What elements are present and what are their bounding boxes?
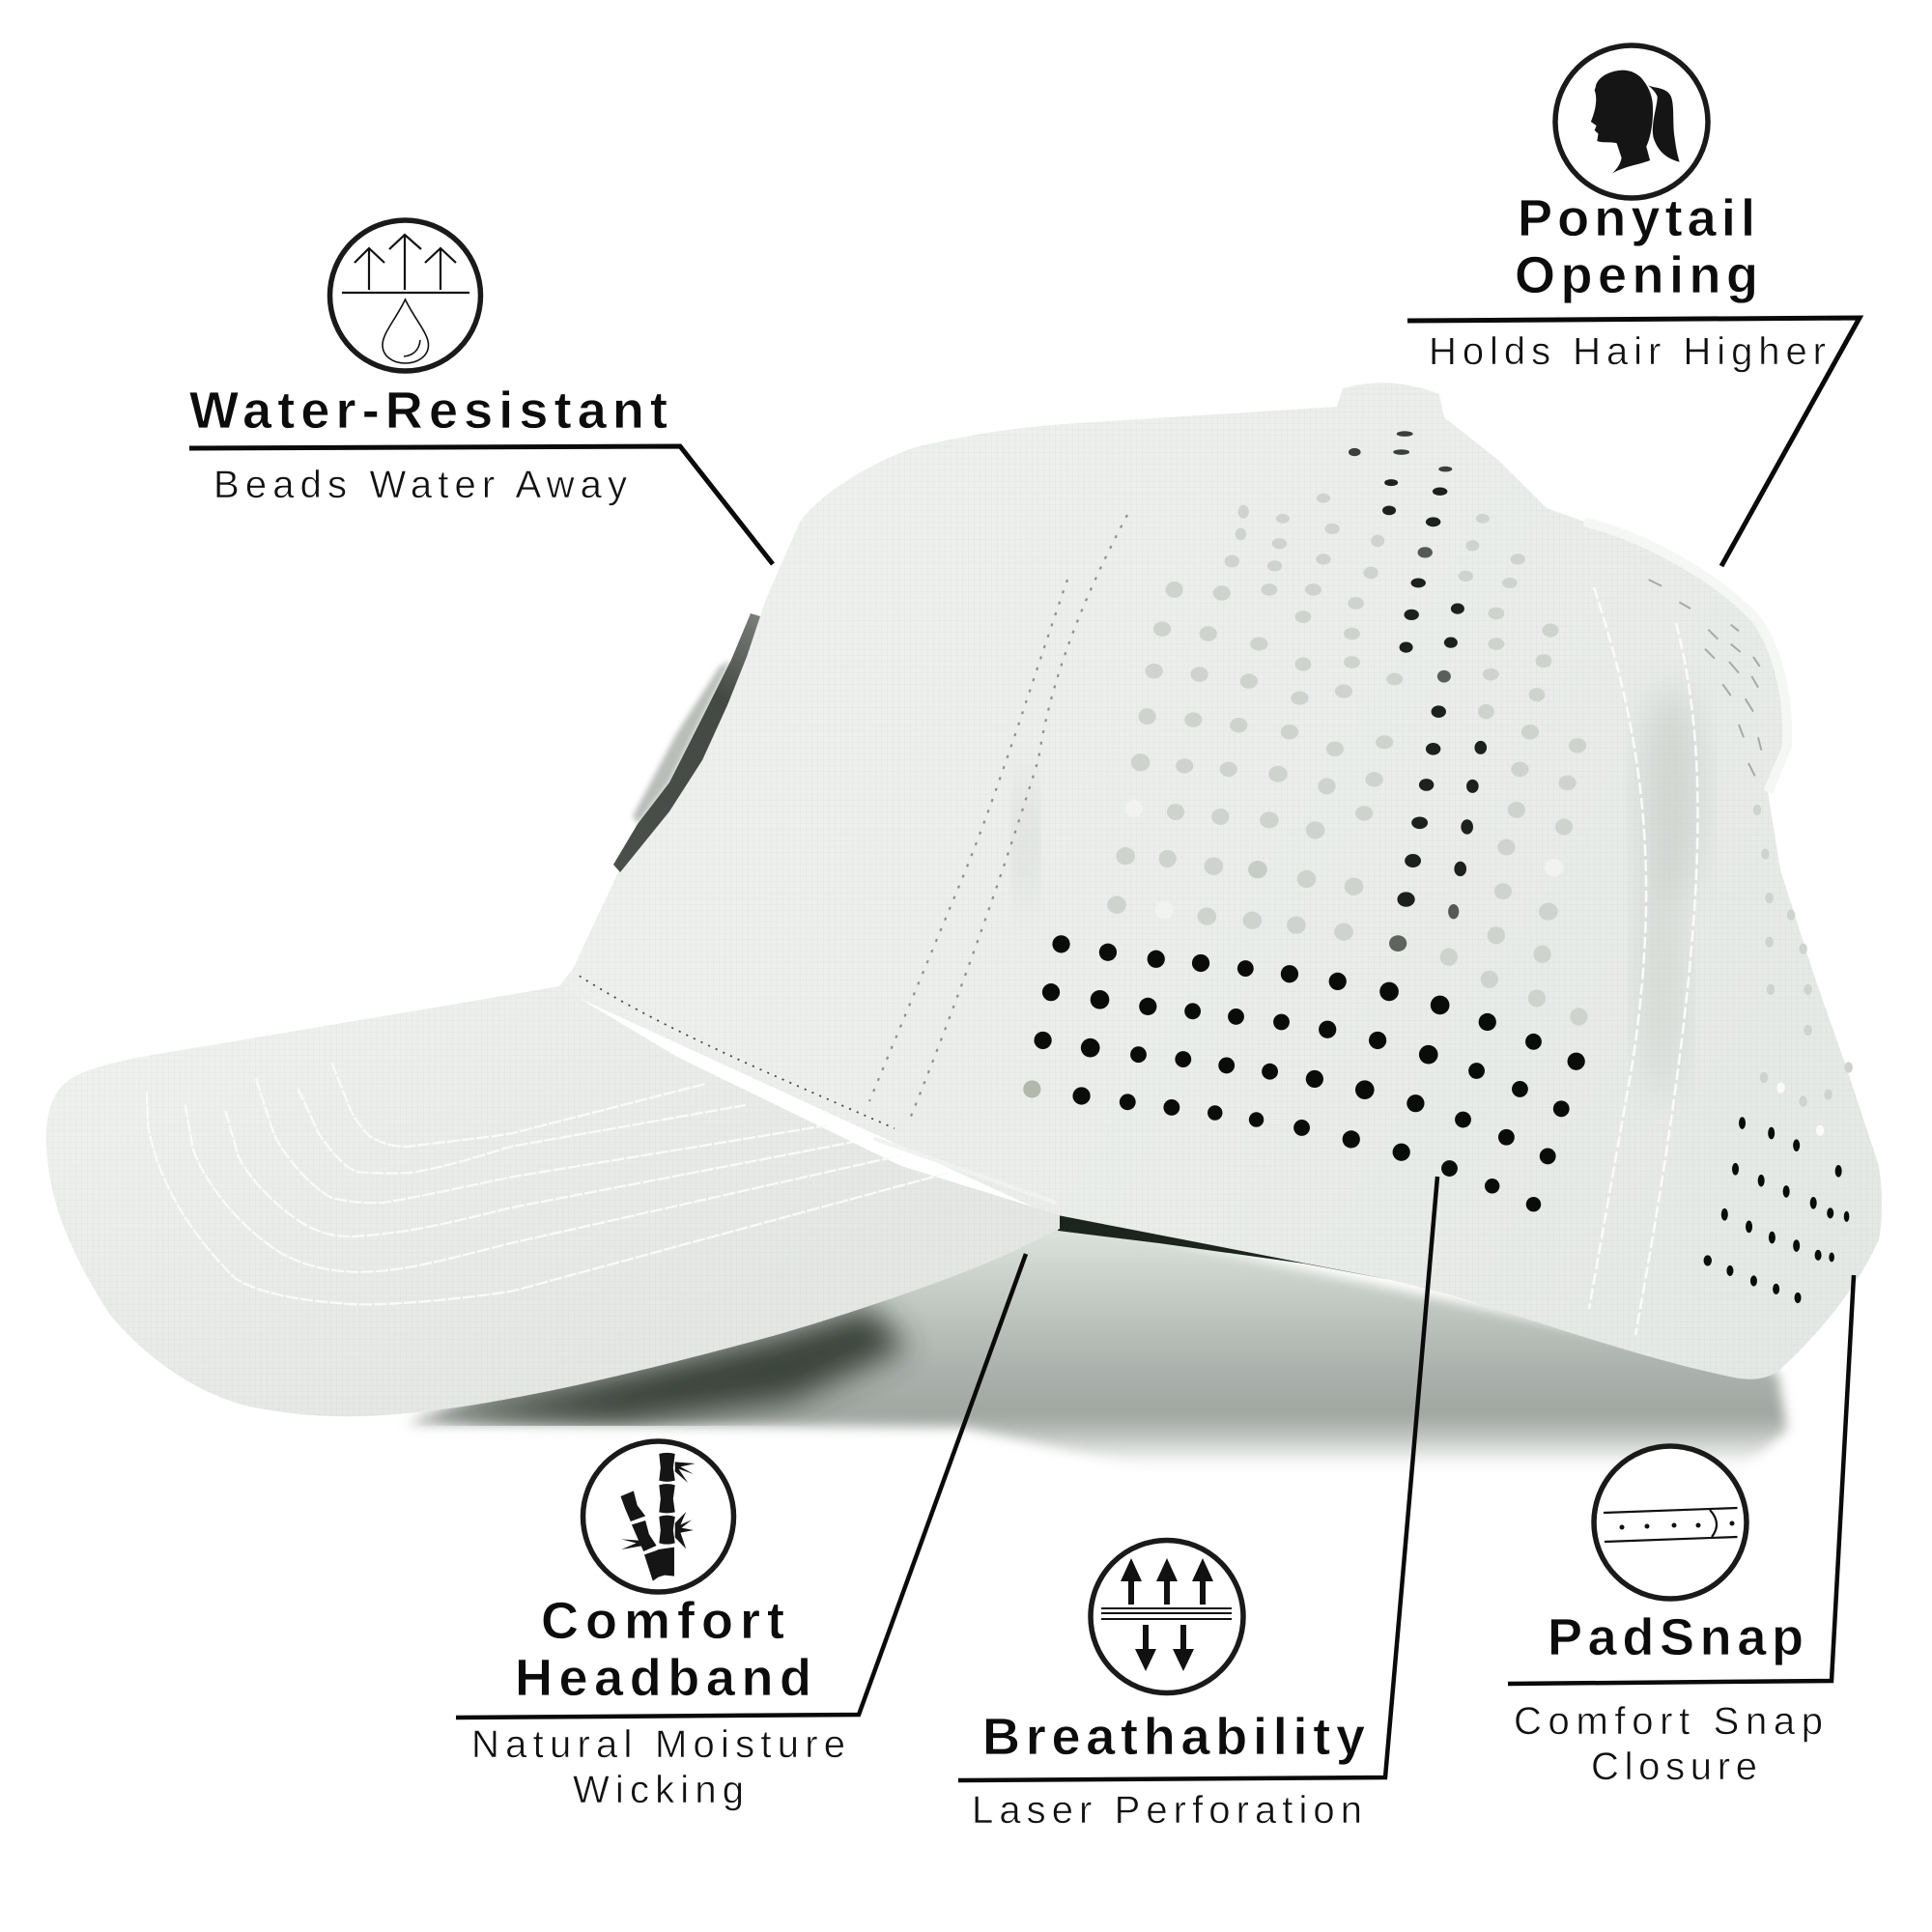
callout: ponytail opening <box>1407 45 1860 566</box>
icon: ponytail silhouette <box>1555 45 1708 198</box>
heading: Breathability <box>982 1708 1365 1766</box>
description line 2: Closure <box>1591 1746 1757 1788</box>
light perforations <box>1023 494 1853 1136</box>
top-back slit perforations <box>1649 580 1761 776</box>
heading: Water-Resistant <box>189 382 668 440</box>
hat <box>46 383 1882 1416</box>
ground shadow under hat <box>406 1217 1787 1470</box>
callout: comfort headband <box>456 1254 1026 1811</box>
dark perforations: lower band <box>1034 935 1585 1211</box>
heading line 2: Headband <box>515 1649 811 1707</box>
callout: breathability <box>958 1177 1437 1832</box>
dark perforations: centre column <box>1349 431 1487 952</box>
leader line <box>456 1254 1026 1718</box>
leader line <box>958 1177 1437 1780</box>
icon: airflow arrows <box>1091 1540 1243 1692</box>
perforations <box>1023 431 1853 1303</box>
leader line <box>189 446 773 564</box>
description: Laser Perforation <box>972 1789 1362 1832</box>
heading: Ponytail <box>1518 189 1755 247</box>
logo patch crescent <box>613 613 760 872</box>
description: Natural Moisture <box>471 1723 845 1766</box>
crown base seam <box>566 976 1057 1203</box>
heading line 2: Opening <box>1515 246 1758 304</box>
crown <box>557 383 1882 1379</box>
icon: bamboo <box>583 1441 734 1592</box>
description: Comfort Snap <box>1514 1700 1823 1743</box>
description: Beads Water Away <box>213 464 627 506</box>
description line 2: Wicking <box>573 1769 744 1811</box>
heading: Comfort <box>541 1592 784 1650</box>
callout: padsnap <box>1508 1275 1854 1788</box>
icon: snap strap <box>1594 1446 1747 1599</box>
leader line <box>1508 1275 1854 1684</box>
dark perforations: back panel <box>1704 1117 1849 1303</box>
leader line <box>1407 318 1860 566</box>
callout: water-resistant <box>189 220 773 564</box>
heading: PadSnap <box>1548 1608 1804 1666</box>
icon: water beading <box>330 220 481 371</box>
headband dark edge <box>1058 1215 1391 1280</box>
brim stitching <box>147 1063 949 1304</box>
brim <box>46 976 1060 1416</box>
description: Holds Hair Higher <box>1429 330 1826 373</box>
